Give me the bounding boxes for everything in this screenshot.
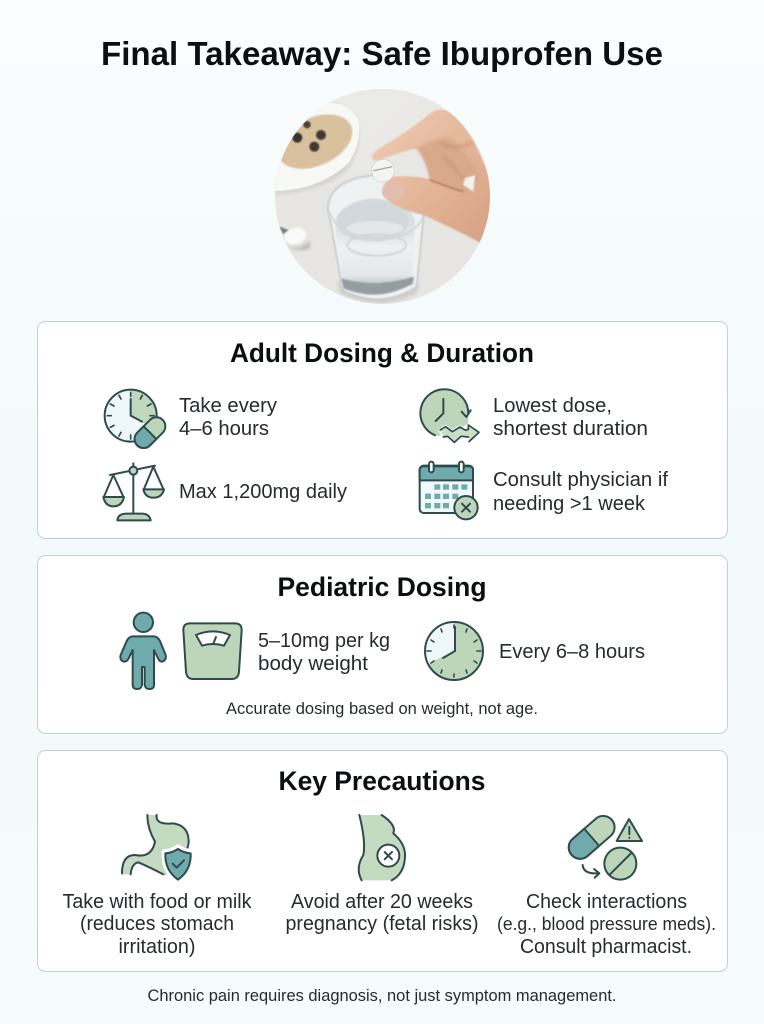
panel: adult dosing and duration — [38, 322, 728, 538]
panel: pediatric dosing: body weight — [258, 653, 368, 675]
panel: key precautions: irritation) — [118, 936, 196, 958]
heading: adult dosing: Adult Dosing & Duration — [230, 338, 534, 368]
text: mg per kg: 5–10mg per kg — [258, 630, 390, 652]
icon: balance scale — [103, 463, 164, 520]
text: take with food: Take with food or milk — [62, 891, 252, 913]
panel: key precautions: (reduces stomach — [80, 913, 234, 935]
footer note: Chronic pain requires diagnosis, not just symptom management. — [148, 986, 616, 1005]
icon: calendar with x — [420, 462, 478, 519]
panel: key precautions — [38, 750, 728, 972]
panel: adult dosing and duration: shortest duration — [493, 418, 648, 440]
text: every 6-8 hours: Every 6–8 hours — [499, 641, 645, 663]
panel: adult dosing and duration: 4–6 hours — [179, 418, 269, 440]
icon: stomach with shield — [122, 815, 192, 881]
text: check interactions: Check interactions — [526, 891, 687, 913]
icon: pregnancy silhouette with x — [359, 815, 405, 880]
panel: key precautions: Consult pharmacist. — [520, 936, 692, 958]
panel: key precautions: pregnancy (fetal risks) — [286, 913, 478, 935]
heading: key precautions: Key Precautions — [278, 766, 486, 796]
text: consult physician: Consult physician if — [493, 469, 668, 491]
panel: pediatric dosing — [38, 556, 728, 734]
icon: clock with wavy arrow — [420, 389, 479, 442]
icon: child figure — [120, 613, 166, 689]
text: lowest dose shortest duration: Lowest dose, — [493, 395, 612, 417]
text: accurate dosing note: Accurate dosing based on weight, not age. — [226, 699, 538, 718]
text: avoid after 20 weeks: Avoid after 20 weeks — [291, 891, 473, 913]
icon: clock with capsule — [105, 390, 169, 452]
text: take every 4-6 hours: Take every — [179, 395, 277, 417]
title: Final Takeaway: Safe Ibuprofen Use — [101, 35, 663, 72]
photo: hand dropping tablet into glass of water — [269, 87, 493, 307]
text: max daily dose: Max 1,200mg daily — [179, 481, 347, 503]
icon: clock six to eight hours — [425, 622, 483, 680]
icon: capsule, tablet and warning — [564, 811, 642, 880]
icon: weighing scale — [183, 623, 242, 679]
panel: adult dosing and duration: needing >1 week — [493, 493, 646, 515]
panel: key precautions: (e.g., blood pressure meds). — [497, 914, 716, 934]
heading: pediatric dosing: Pediatric Dosing — [278, 572, 486, 602]
